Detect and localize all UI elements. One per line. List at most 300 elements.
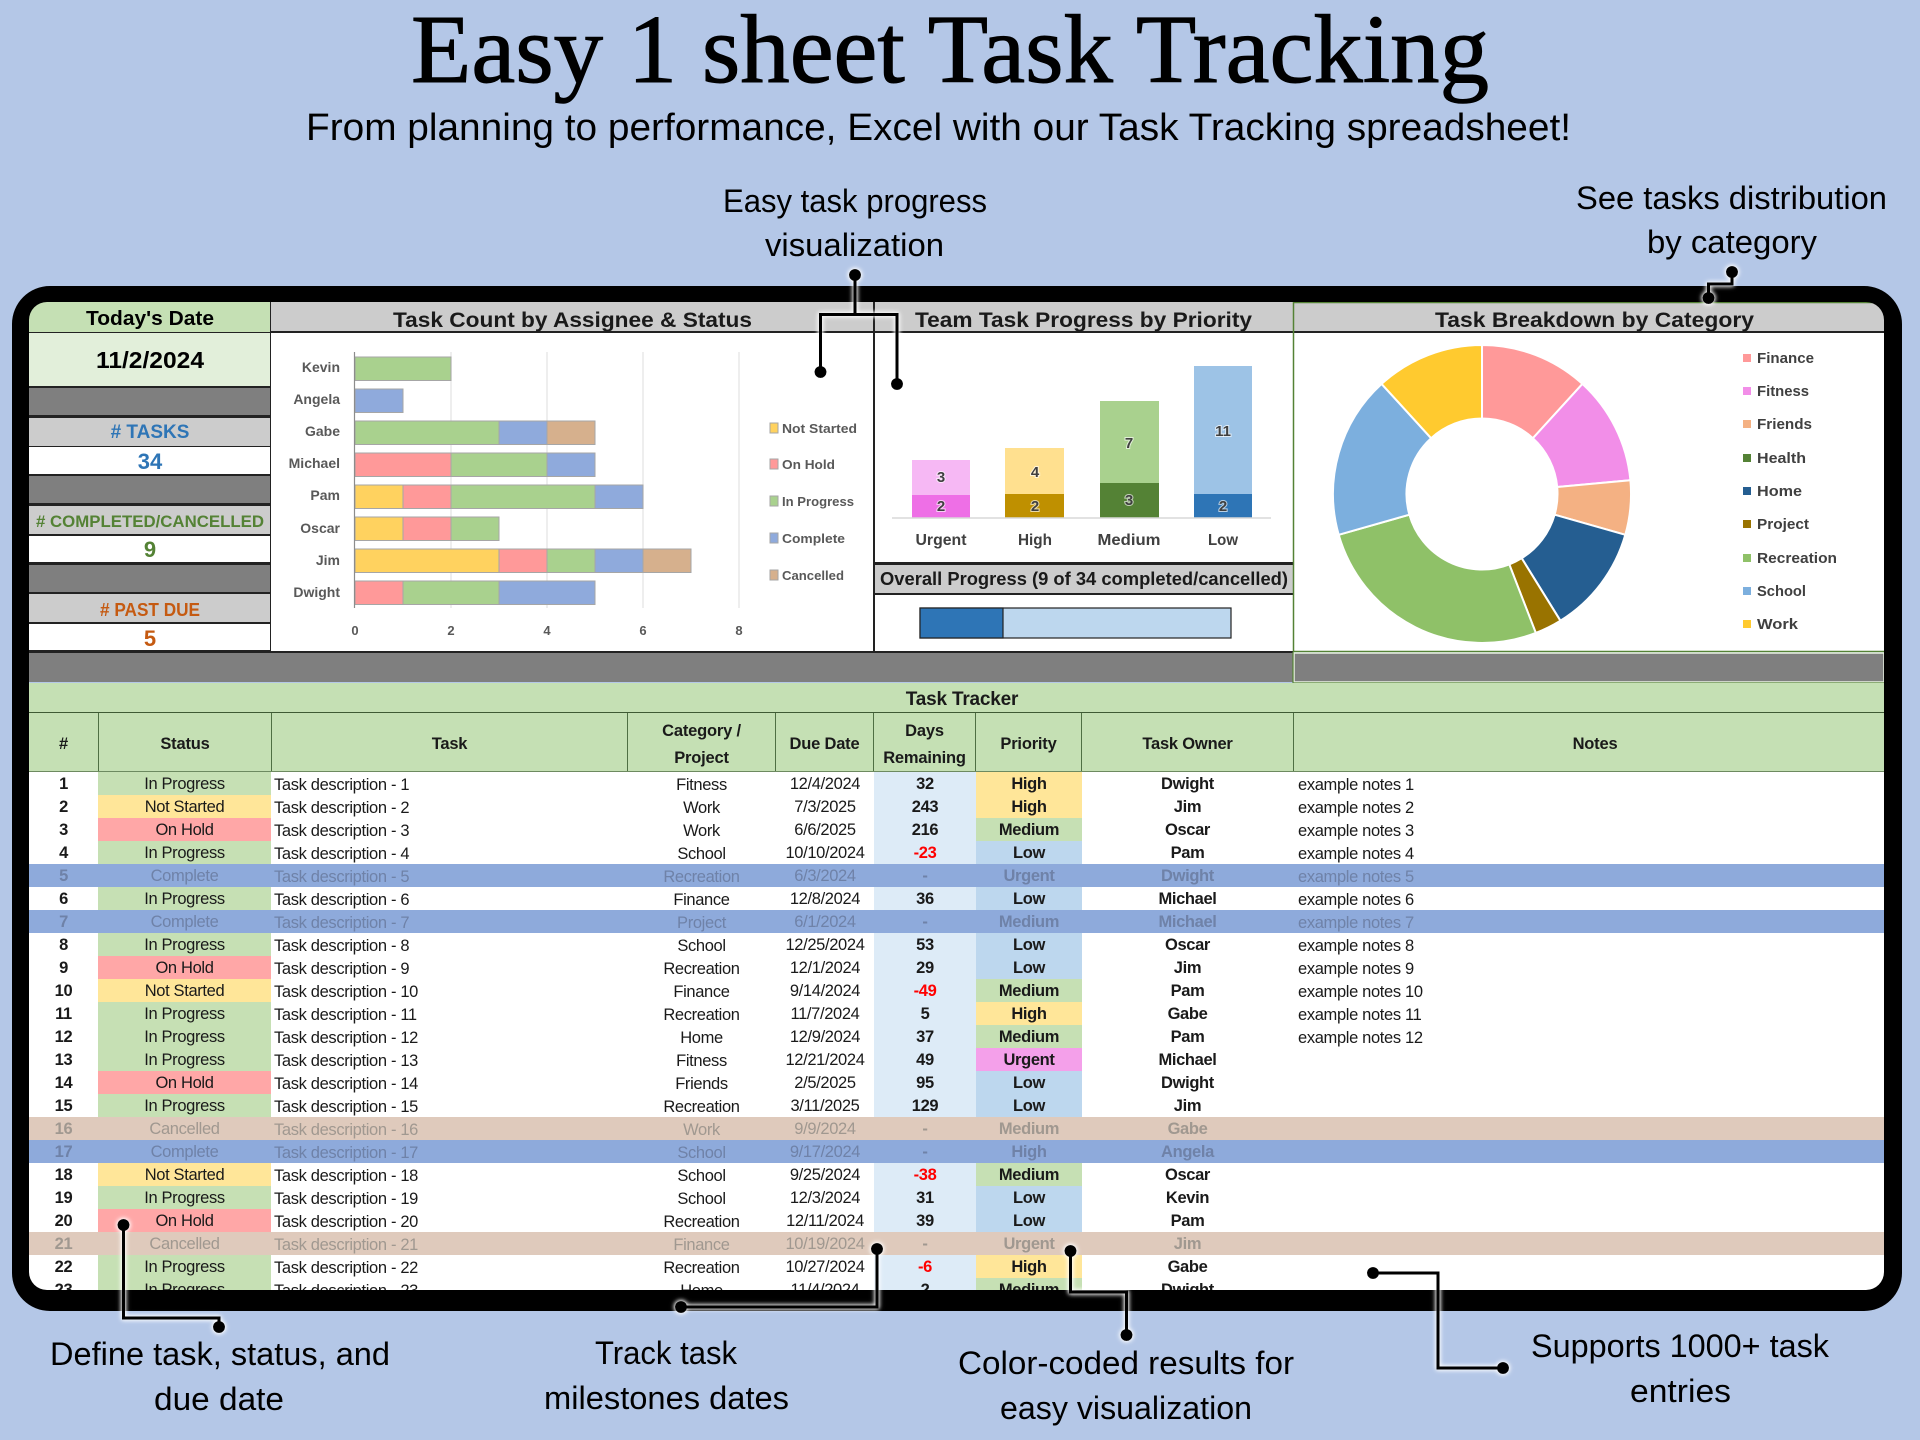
row 8: Oscar [1165,936,1210,954]
x axis labels: 4 [543,623,551,638]
row 2: Not Started [145,798,224,816]
row 23 [29,1278,1884,1301]
row 11: Gabe [1168,1005,1207,1023]
row 18: Oscar [1165,1166,1210,1184]
arrow: progress visualization connector [816,270,902,388]
row 13: 13 [55,1051,72,1069]
assignee labels: Oscar [300,520,341,536]
row 4: -23 [914,844,936,862]
row 3: Work [683,822,720,840]
callout: define task: Define task, status, and [50,1336,390,1372]
row 17: - [922,1143,928,1161]
row 12: Task description - 12 [274,1029,418,1047]
overall progress heading [875,562,1293,595]
row 4: example notes 4 [1298,845,1414,863]
row 18: 18 [55,1166,72,1184]
category legend [1743,350,1837,633]
tasks KPI [29,418,270,474]
row 5: Urgent [1003,867,1055,885]
assignee labels: Pam [310,487,340,503]
category legend: Fitness [1757,383,1809,400]
row 5 [29,864,1884,887]
row 20: 12/11/2024 [786,1212,864,1230]
data labels: 11 [1215,423,1231,440]
row 5: Recreation [663,868,740,886]
panel: task breakdown by category [1293,302,1884,683]
row 6: example notes 6 [1298,891,1414,909]
row 8: Low [1013,936,1045,954]
callout: distribution by category [1576,180,1887,260]
overall progress bar [920,608,1231,638]
row 8 [29,933,1884,956]
row 10: Medium [999,982,1059,1000]
table column headers: Notes [1573,735,1617,753]
category legend: Recreation [1757,550,1837,567]
row 18 [29,1163,1884,1186]
row 17: 17 [55,1143,72,1161]
row 20: Low [1013,1212,1045,1230]
category legend: Project [1757,516,1809,533]
data labels: 4 [1031,464,1040,481]
row 9: example notes 9 [1298,960,1414,978]
x axis labels: 6 [639,623,647,638]
x axis labels: 2 [447,623,455,638]
callout: define task [50,1336,390,1417]
assignee labels: Jim [316,552,340,568]
data labels: 2 [1219,498,1227,515]
category legend: Finance [1757,350,1814,367]
row 5: Complete [151,867,218,885]
row 6: Finance [673,891,730,909]
completed/cancelled KPI [29,506,270,562]
row 3: 3 [59,821,68,839]
row 2: Work [683,799,720,817]
row 1: In Progress [144,775,225,793]
row 8: 8 [59,936,68,954]
row 22: 22 [55,1258,72,1276]
row 10: -49 [914,982,936,1000]
subtitle: From planning to performance, Excel with our Task Tracking spreadsheet! [306,107,1571,149]
x axis labels: 0 [351,623,359,638]
completed/cancelled KPI: 9 [144,537,156,562]
row 13 [29,1048,1884,1071]
priority labels: Medium [1098,532,1160,549]
row 17: Angela [1161,1143,1214,1161]
row 3: Task description - 3 [274,822,409,840]
row 3: Medium [999,821,1059,839]
row 16: Medium [999,1120,1059,1138]
category legend: Home [1757,483,1802,500]
row 17: High [1011,1143,1047,1161]
callout: supports 1000+ entries: entries [1630,1373,1731,1409]
status legend: Not Started [782,421,857,436]
tasks KPI: 34 [138,449,163,474]
row 10 [29,979,1884,1002]
row 20: On Hold [155,1212,214,1230]
row 9: 12/1/2024 [790,959,860,977]
callout: distribution by category: See tasks distribution [1576,180,1887,216]
row 17: Task description - 17 [274,1144,418,1162]
priority stacked column chart [892,366,1271,549]
row 14: 2/5/2025 [794,1074,856,1092]
row 3: 6/6/2025 [794,821,856,839]
priority labels [916,532,1239,549]
row 22: Task description - 22 [274,1259,418,1277]
row 13: 12/21/2024 [785,1051,865,1069]
row 3: On Hold [155,821,214,839]
row 7: 6/1/2024 [794,913,856,931]
callout: milestone dates: Track task [595,1335,738,1371]
assignee labels: Michael [289,455,340,471]
row 5: - [922,867,928,885]
callout: define task: due date [154,1381,284,1417]
row 19: Task description - 19 [274,1190,418,1208]
row 20: Task description - 20 [274,1213,418,1231]
row 12: 12/9/2024 [790,1028,860,1046]
data labels: 3 [937,469,945,486]
chart heading: Task Count by Assignee & Status [393,309,752,332]
row 16 [29,1117,1884,1140]
row 18: -38 [914,1166,936,1184]
row 18: 9/25/2024 [790,1166,860,1184]
row 16: Gabe [1168,1120,1207,1138]
row 9: Jim [1174,959,1201,977]
row 11: 11 [55,1005,72,1023]
divider gray band [29,651,1293,653]
arrow: category connector [1704,268,1736,302]
row 22: -6 [918,1258,932,1276]
row 14 [29,1071,1884,1094]
row 12: Pam [1171,1028,1204,1046]
row 3 [29,818,1884,841]
row 1: 32 [916,775,934,793]
row 14: 95 [916,1074,934,1092]
row 5: example notes 5 [1298,868,1414,886]
callout: progress visualization [723,183,987,263]
category legend: Work [1757,616,1799,633]
row 13: Michael [1158,1051,1217,1069]
row 9 [29,956,1884,979]
row 10: Finance [673,983,730,1001]
row 4 [29,841,1884,864]
callout: progress visualization: Easy task progress [723,183,987,219]
status legend: On Hold [782,457,835,472]
row 10: 10 [55,982,72,1000]
row 21: Finance [673,1236,730,1254]
row 20: Recreation [663,1213,740,1231]
row 10: 9/14/2024 [790,982,860,1000]
callout: milestone dates [544,1335,789,1416]
table title band [29,683,1884,713]
row 5: 6/3/2024 [794,867,856,885]
row 1: Fitness [676,776,727,794]
table column headers: # [59,735,68,753]
row 10: Task description - 10 [274,983,418,1001]
row 1 [29,772,1884,795]
priority labels: Urgent [916,532,967,549]
data labels: 3 [1125,492,1133,509]
row 5: 5 [59,867,68,885]
row 19: 31 [916,1189,934,1207]
row 9: Low [1013,959,1045,977]
row 15: 15 [55,1097,72,1115]
row 14: Task description - 14 [274,1075,418,1093]
table column headers: Priority [1000,735,1057,753]
row 12: Medium [999,1028,1059,1046]
row 18: Task description - 18 [274,1167,418,1185]
x axis labels [351,623,743,638]
status legend: In Progress [782,494,854,509]
row 22: Gabe [1168,1258,1207,1276]
row 1: Task description - 1 [274,776,409,794]
row 16: 16 [55,1120,72,1138]
row 15: Recreation [663,1098,740,1116]
assignee labels: Gabe [305,423,340,439]
row 3: Oscar [1165,821,1210,839]
row 11: In Progress [144,1005,225,1023]
today's date heading [29,302,270,332]
assignee labels: Dwight [293,584,340,600]
row 4: In Progress [144,844,225,862]
row 18: Not Started [145,1166,224,1184]
completed/cancelled KPI: # COMPLETED/CANCELLED [36,512,264,531]
row 9: 29 [916,959,934,977]
row 5: Dwight [1161,867,1214,885]
row 10: Pam [1171,982,1204,1000]
row 8: Task description - 8 [274,937,409,955]
row 11: High [1011,1005,1047,1023]
row 16: Work [683,1121,720,1139]
row 19: 12/3/2024 [790,1189,860,1207]
chart heading [875,302,1293,333]
panel: team task progress by priority [873,302,1293,651]
row 6: 12/8/2024 [790,890,860,908]
panel: task count by assignee and status [271,302,874,651]
assignee labels: Kevin [302,359,340,375]
row 10: Not Started [145,982,224,1000]
row 22: High [1011,1258,1047,1276]
row 12: In Progress [144,1028,225,1046]
table column headers: Project [674,748,729,766]
row 19 [29,1186,1884,1209]
row 18: Medium [999,1166,1059,1184]
today's date heading: Today's Date [86,308,214,330]
row 4: 4 [59,844,68,862]
panel: KPI column [29,302,271,682]
row 12 [29,1025,1884,1048]
row 2 [29,795,1884,818]
donut chart [1333,345,1631,643]
row 15 [29,1094,1884,1117]
row 4: Pam [1171,844,1204,862]
row 14: On Hold [155,1074,214,1092]
data labels: 2 [1031,498,1039,515]
today's date value [29,333,270,386]
row 22: Recreation [663,1259,740,1277]
row 9: On Hold [155,959,214,977]
category legend: Health [1757,450,1806,467]
row 13: Urgent [1003,1051,1055,1069]
row 21: - [922,1235,928,1253]
row 13: In Progress [144,1051,225,1069]
row 8: example notes 8 [1298,937,1414,955]
row 15: Low [1013,1097,1045,1115]
row 11: Task description - 11 [274,1006,417,1024]
row 15: 3/11/2025 [790,1097,860,1115]
row 12: 37 [916,1028,934,1046]
row 17 [29,1140,1884,1163]
row 21: Cancelled [149,1235,220,1253]
row 22: In Progress [144,1258,225,1276]
past due KPI [29,594,270,651]
row 2: Jim [1174,798,1201,816]
row 19: Kevin [1166,1189,1209,1207]
row 6 [29,887,1884,910]
row 6: Michael [1158,890,1217,908]
chart heading: Task Breakdown by Category [1435,309,1754,332]
row 12: Home [680,1029,723,1047]
table column headers [29,713,1884,772]
row 6: 36 [916,890,934,908]
row 14: 14 [55,1074,72,1092]
row 7: - [922,913,928,931]
table column headers: Task Owner [1142,735,1233,753]
black device frame [12,286,1902,1311]
table title band: Task Tracker [906,689,1018,710]
callout: distribution by category: by category [1647,224,1817,260]
row 15: In Progress [144,1097,225,1115]
row 10: example notes 10 [1298,983,1423,1001]
row 6: Low [1013,890,1045,908]
callout: supports 1000+ entries [1531,1328,1830,1409]
row 7: Task description - 7 [274,914,409,932]
row 2: 2 [59,798,68,816]
table column headers: Remaining [883,748,966,766]
row 2: 7/3/2025 [794,798,856,816]
row 7: 7 [59,913,68,931]
row 1: High [1011,775,1047,793]
row 8: In Progress [144,936,225,954]
row 18: School [677,1167,726,1185]
priority labels: High [1018,532,1052,549]
row 6: 6 [59,890,68,908]
x axis labels: 8 [735,623,743,638]
row 8: School [677,937,726,955]
callout: color-coded results [958,1345,1294,1426]
row 7: Complete [151,913,218,931]
arrow: color-coded connector [1066,1246,1131,1340]
callout: progress visualization: visualization [765,227,944,263]
row 4: 10/10/2024 [785,844,865,862]
data labels: 7 [1125,435,1133,452]
callout: color-coded results: Color-coded results for [958,1345,1294,1381]
row 14: Low [1013,1074,1045,1092]
row 3: 216 [912,821,938,839]
today's date value: 11/2/2024 [96,347,204,373]
row 2: Task description - 2 [274,799,409,817]
chart heading [1293,302,1884,333]
row 12: 12 [55,1028,72,1046]
row 11: Recreation [663,1006,740,1024]
row 1: Dwight [1161,775,1214,793]
row 17: School [677,1144,726,1162]
row 20: 20 [55,1212,72,1230]
row 21: Urgent [1003,1235,1055,1253]
row 17: Complete [151,1143,218,1161]
row 16: Task description - 16 [274,1121,418,1139]
row 1: example notes 1 [1298,776,1414,794]
priority labels: Low [1208,532,1239,549]
chart heading [271,302,874,333]
table column headers: Due Date [790,735,859,753]
row 14: Dwight [1161,1074,1214,1092]
row 19: In Progress [144,1189,225,1207]
row 7: Project [677,914,726,932]
row 19: 19 [55,1189,72,1207]
row 15: 129 [912,1097,938,1115]
arrow: entries connector [1368,1268,1508,1372]
row 1: 12/4/2024 [790,775,860,793]
row 3: example notes 3 [1298,822,1414,840]
row 4: Low [1013,844,1045,862]
table column headers: Category / [662,722,741,740]
row 13: Task description - 13 [274,1052,418,1070]
row 15: Jim [1174,1097,1201,1115]
row 19: School [677,1190,726,1208]
arrow: milestone connector [676,1244,882,1312]
data labels: 2 [937,498,945,515]
status legend: Cancelled [782,568,844,583]
row 15: Task description - 15 [274,1098,418,1116]
chart heading: Team Task Progress by Priority [915,309,1252,332]
tasks KPI: # TASKS [111,422,189,443]
row 4: School [677,845,726,863]
row 11 [29,1002,1884,1025]
row 14: Friends [675,1075,728,1093]
table column headers: Status [160,735,210,753]
assignee labels [289,359,341,600]
row 21: 21 [55,1235,72,1253]
row 12: example notes 12 [1298,1029,1423,1047]
row 6: Task description - 6 [274,891,409,909]
row 9: Task description - 9 [274,960,409,978]
row 5: Task description - 5 [274,868,409,886]
row 6: In Progress [144,890,225,908]
row 20: 39 [916,1212,934,1230]
row 7: Michael [1158,913,1217,931]
row 11: 5 [921,1005,929,1023]
panel: task tracker table [29,683,1884,1290]
overall progress heading: Overall Progress (9 of 34 completed/cancelled) [880,569,1288,589]
row 11: example notes 11 [1298,1006,1421,1024]
arrow: define task connector [119,1220,224,1332]
callout: supports 1000+ entries: Supports 1000+ task [1531,1328,1830,1364]
row 1: 1 [59,775,68,793]
assignee labels: Angela [293,391,340,407]
row 22: 10/27/2024 [785,1258,865,1276]
row 2: 243 [912,798,938,816]
row 16: - [922,1120,928,1138]
row 13: 49 [916,1051,934,1069]
row 7: Medium [999,913,1059,931]
row 19: Low [1013,1189,1045,1207]
data labels [937,423,1231,515]
stacked bar chart [355,357,691,604]
row 2: example notes 2 [1298,799,1414,817]
row 4: Task description - 4 [274,845,409,863]
row 20: Pam [1171,1212,1204,1230]
row 11: 11/7/2024 [790,1005,860,1023]
